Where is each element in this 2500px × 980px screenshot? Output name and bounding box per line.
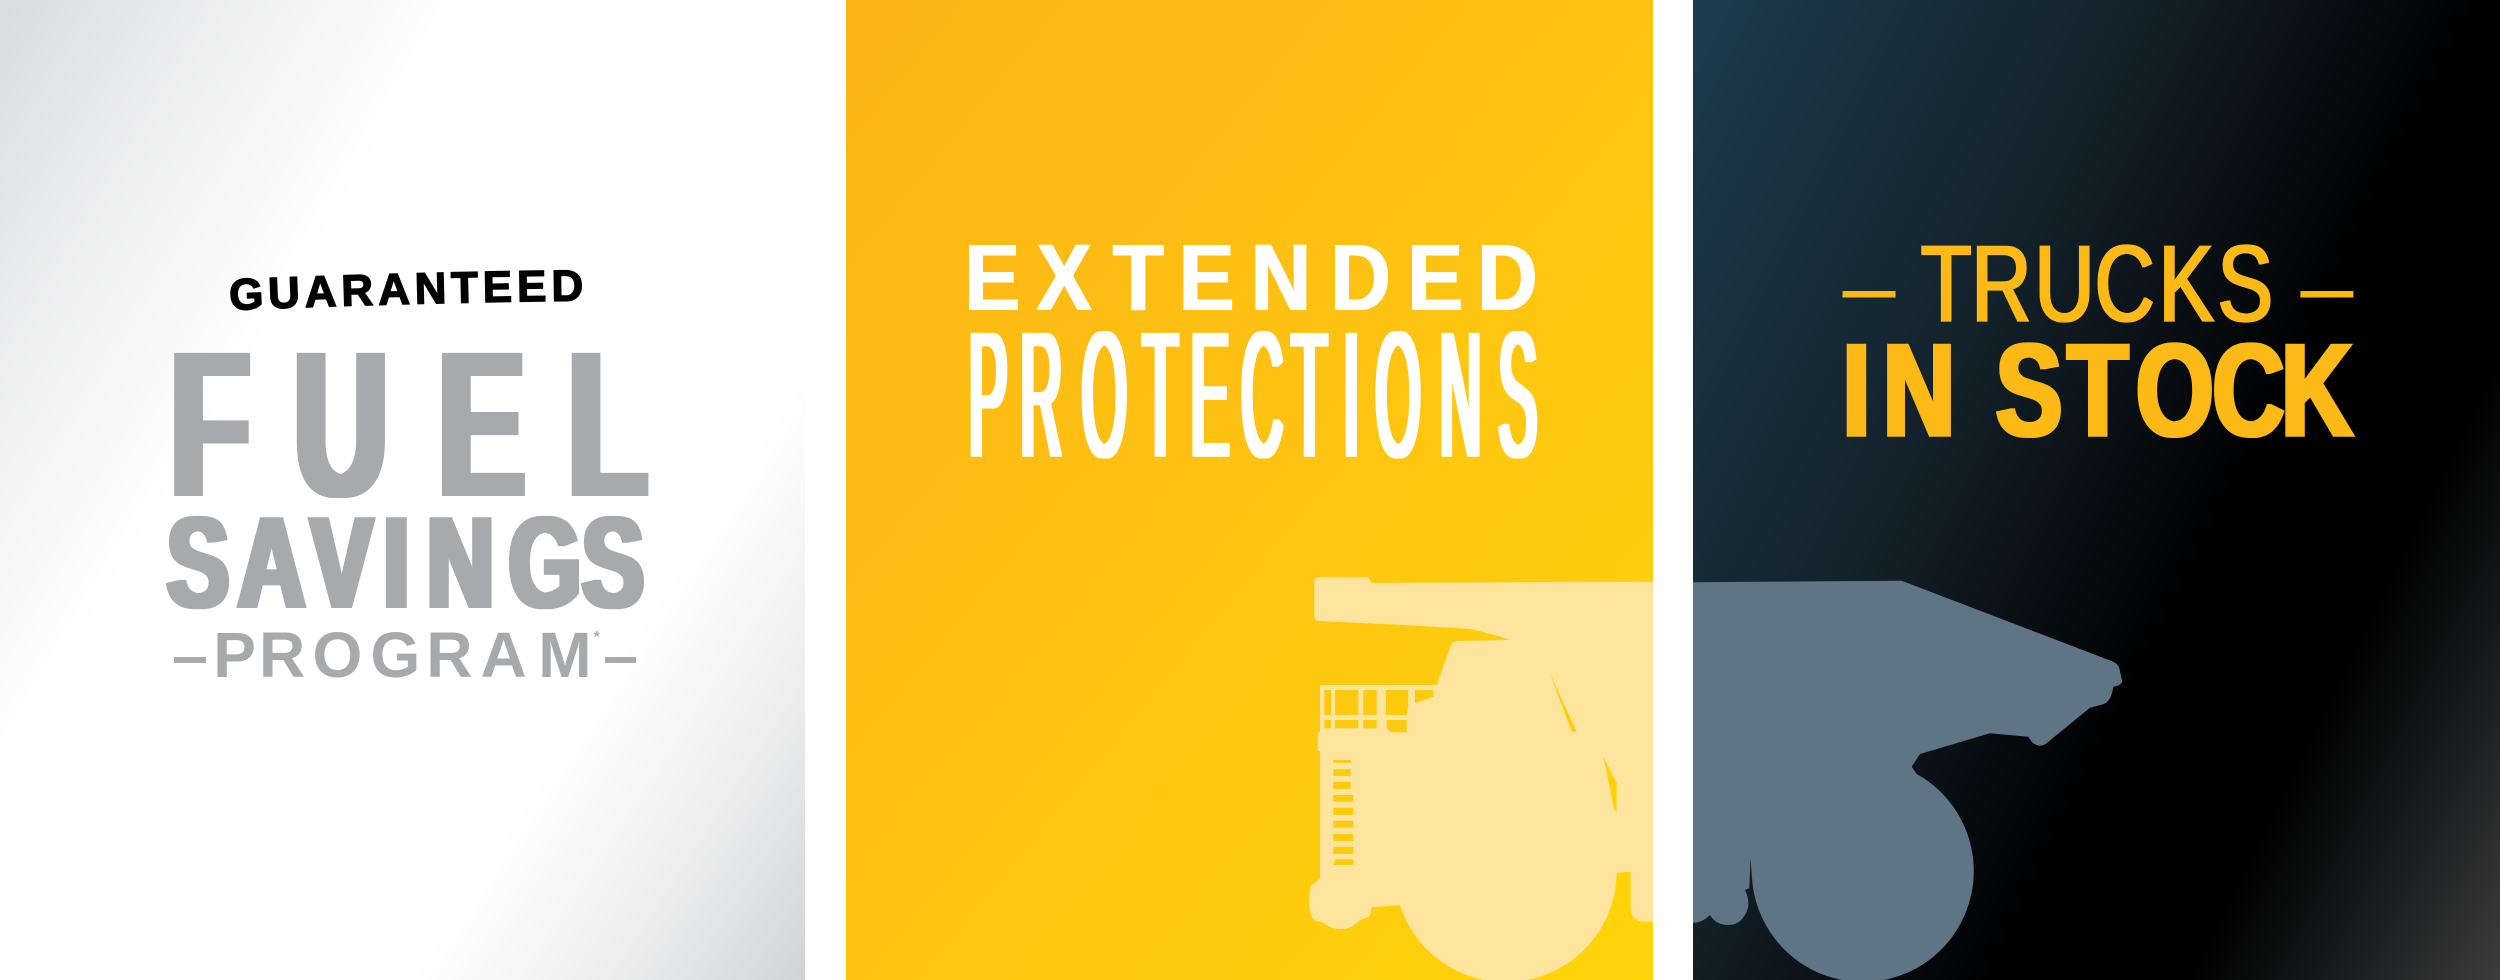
panel: extended protections <box>846 0 1653 980</box>
heading: savings: SAVINGS <box>167 490 644 635</box>
heading: protections: PROTECTIONS <box>969 295 1537 496</box>
heading: trucks with dashes <box>1842 222 2353 345</box>
heading: fuel: FUEL <box>170 308 647 540</box>
heading: in stock: IN STOCK <box>1843 316 2353 464</box>
panel background: silver gradient <box>0 0 805 980</box>
panel: fuel savings <box>0 0 805 980</box>
panel: trucks in stock <box>1693 0 2500 980</box>
heading: program with dashes: PROGRAM <box>213 619 592 691</box>
icon: mining truck silhouette, rear half <box>1693 581 2122 980</box>
panel background: gold gradient <box>846 0 1653 980</box>
heading: guaranteed: GUARANTEED <box>230 270 582 310</box>
heading: program with dashes: * <box>594 629 600 646</box>
icon: mining truck silhouette, front half <box>1309 577 1653 980</box>
panel background: dark gradient <box>1693 0 2500 980</box>
heading: extended: EXTENDED <box>964 224 1537 330</box>
heading: trucks with dashes: TRUCKS <box>1921 222 2273 345</box>
